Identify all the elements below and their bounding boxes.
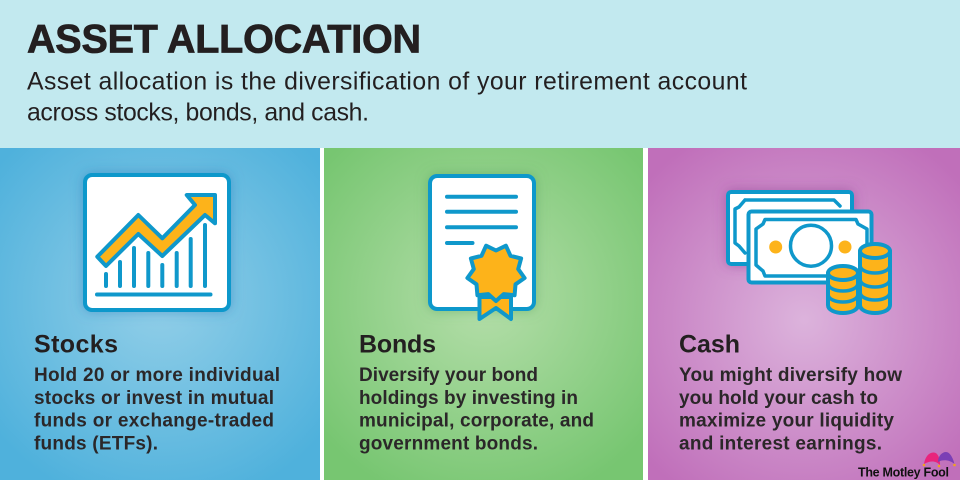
heading: stocks: Stocks (34, 330, 118, 358)
text: bonds description: government bonds. (359, 434, 538, 454)
title: ASSET ALLOCATION (27, 17, 421, 61)
front banknote (748, 212, 872, 282)
text: stocks description (34, 365, 280, 454)
text: bonds description (359, 365, 594, 454)
text: stocks description: funds (ETFs). (34, 434, 158, 454)
text: cash description: and interest earnings. (679, 434, 882, 454)
coin stacks (828, 244, 890, 313)
text: bonds description: municipal, corporate, and (359, 410, 594, 432)
text: bonds description: holdings by investing in (359, 388, 578, 409)
logo: The Motley Fool (858, 452, 956, 480)
wordmark: The Motley Fool (858, 466, 949, 480)
panel: stocks (0, 148, 320, 480)
icon: jester hat (923, 452, 956, 467)
intro text (27, 68, 747, 126)
text: cash description: You might diversify how (679, 365, 902, 386)
intro text: Asset allocation is the diversification of your retirement account (27, 68, 747, 95)
text: cash description: you hold your cash to (679, 388, 878, 409)
icon: rising chart (85, 175, 229, 310)
heading: bonds: Bonds (359, 330, 436, 358)
panel: bonds (324, 148, 643, 480)
icon: banknotes and coins (728, 192, 890, 313)
panel: cash (648, 148, 960, 480)
text: bonds description: Diversify your bond (359, 365, 538, 386)
text: cash description: maximize your liquidity (679, 410, 894, 432)
text: cash description (679, 365, 902, 454)
intro text: across stocks, bonds, and cash. (27, 99, 369, 126)
text: stocks description: Hold 20 or more individual (34, 365, 280, 386)
header band (0, 0, 960, 148)
text: stocks description: funds or exchange-traded (34, 410, 274, 432)
back banknote (728, 192, 852, 264)
text: stocks description: stocks or invest in mutual (34, 388, 274, 409)
heading: cash: Cash (679, 330, 740, 358)
icon: certificate with seal (430, 176, 534, 319)
